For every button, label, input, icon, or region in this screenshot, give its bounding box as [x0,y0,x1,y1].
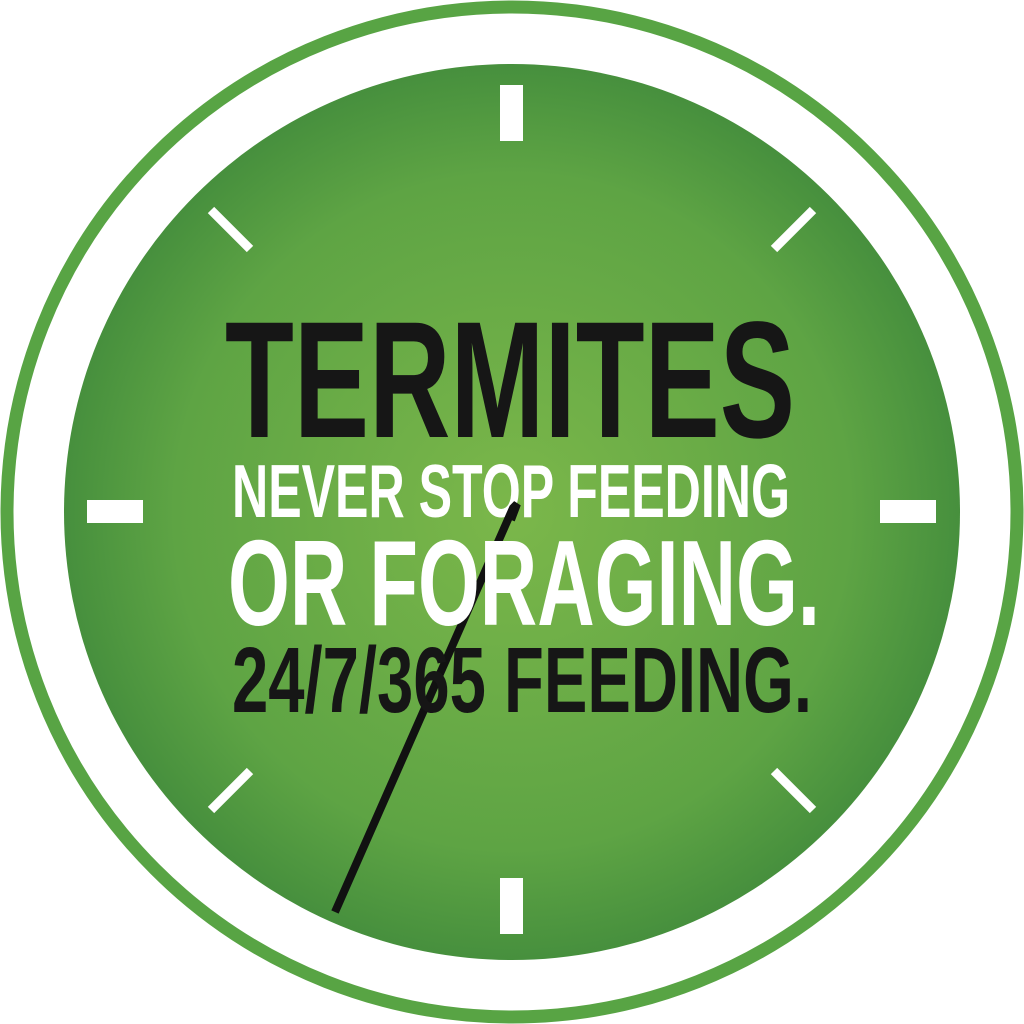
hour ticks [87,85,936,934]
clock hand [335,504,517,912]
clock face [64,64,960,960]
